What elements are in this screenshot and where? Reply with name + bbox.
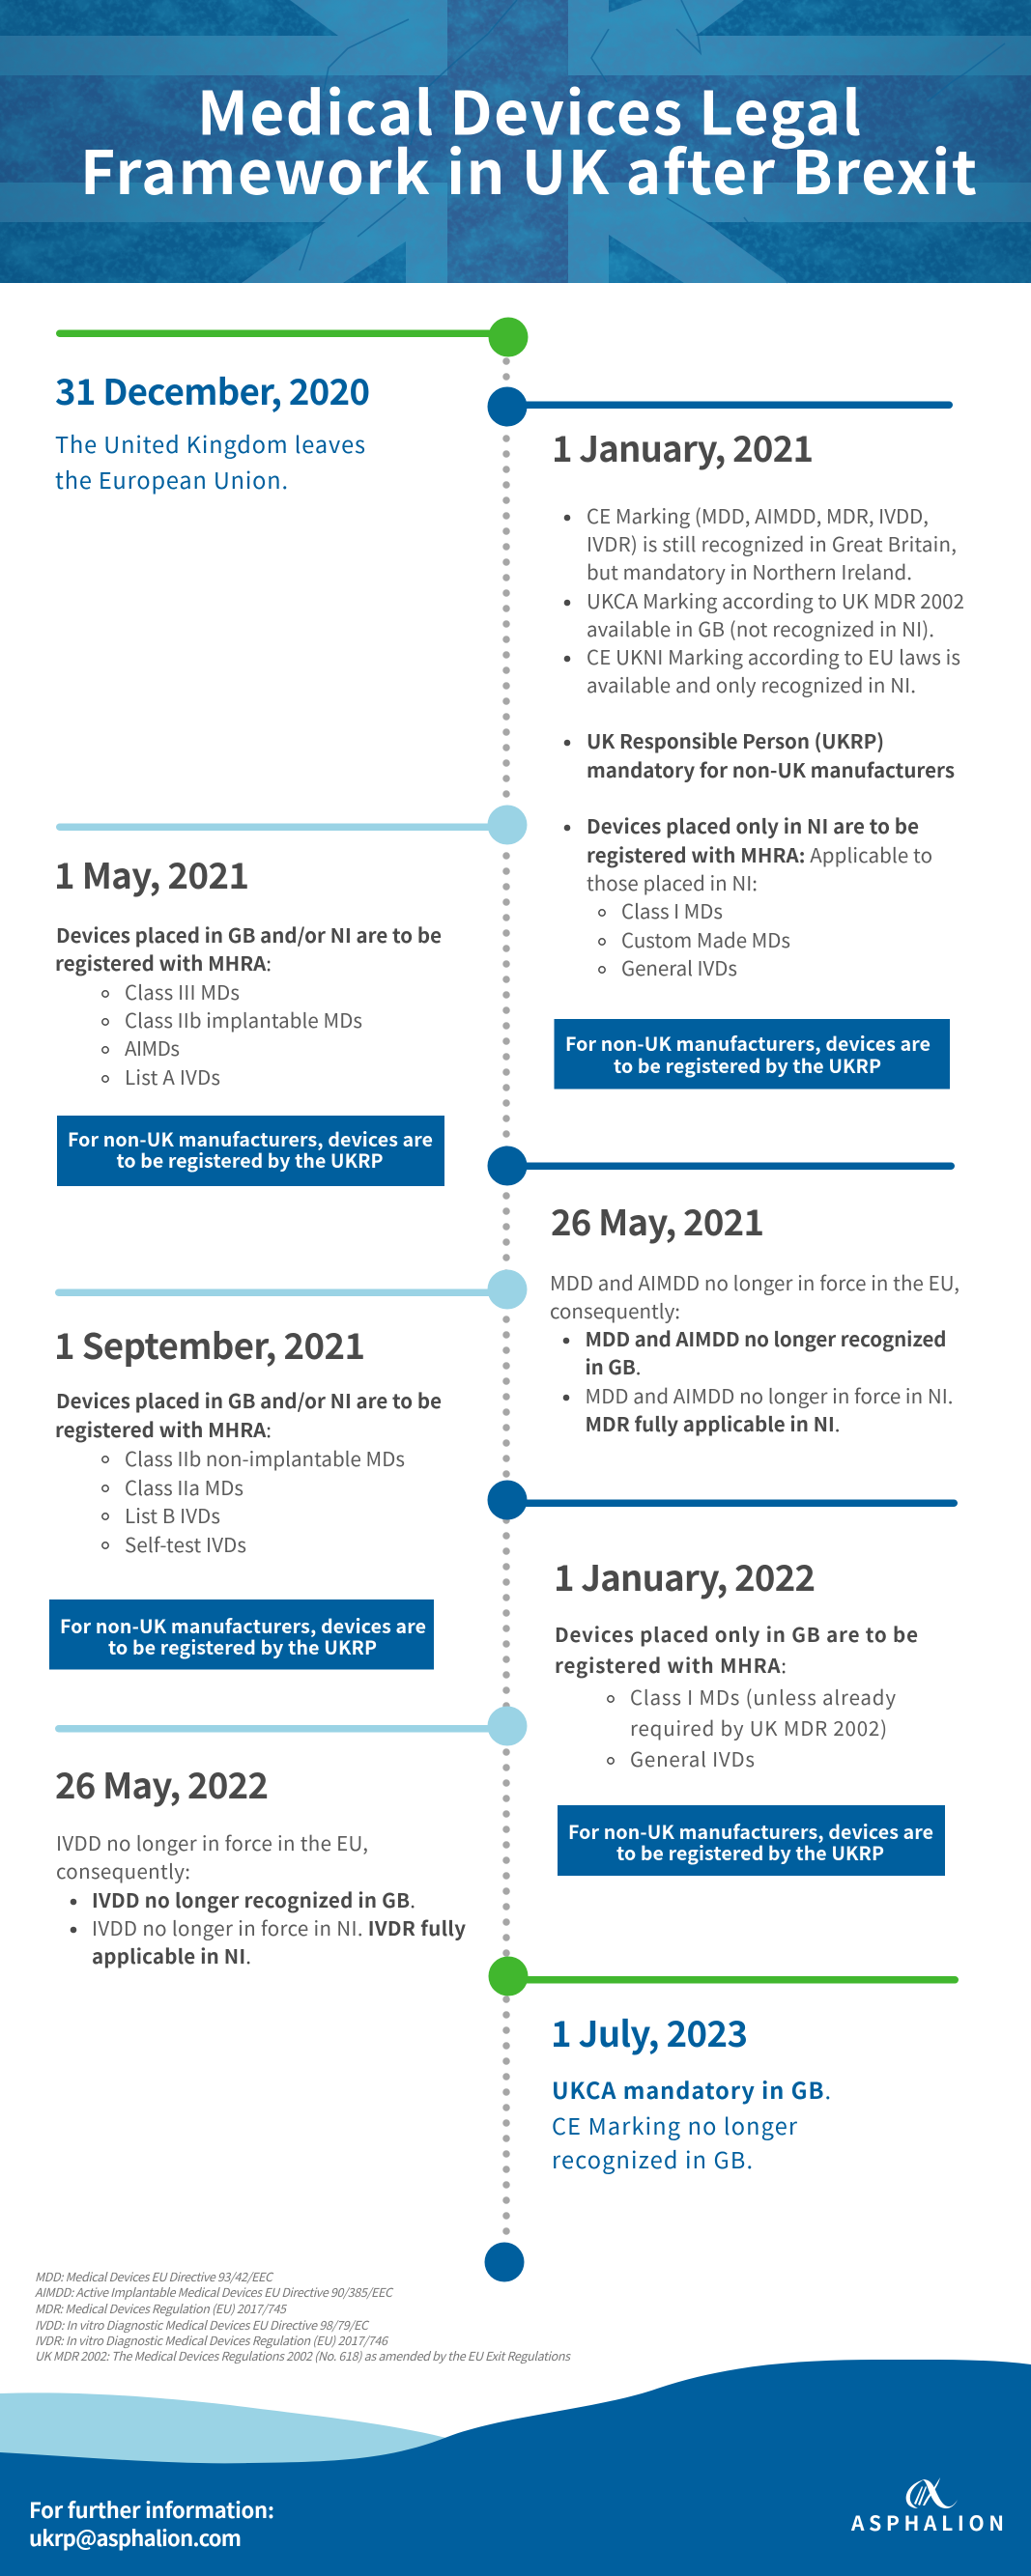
list: devices placed in GB and/or NI, first phase: Class III MDs bbox=[125, 977, 240, 1005]
footnotes: abbreviations: MDD: Medical Devices EU Directive 93/42/EEC bbox=[35, 2267, 274, 2285]
list: IVDD consequences: IVDD no longer recognized in GB. bbox=[92, 1884, 415, 1913]
footnotes: abbreviations: MDR: Medical Devices Regulation (EU) 2017/745 bbox=[35, 2299, 288, 2317]
icon: helix alpha mark bbox=[906, 2477, 958, 2508]
heading: 1 September, 2021: 1 September, 2021 bbox=[54, 1318, 365, 1370]
list: devices placed only in NI: Custom Made MDs bbox=[621, 924, 790, 953]
milestone: 1 May 2021 marker bbox=[56, 806, 528, 844]
milestone: 31 December 2020 marker bbox=[56, 317, 528, 357]
list: CE, UKCA and UKRP requirements: UK Responsible Person (UKRP) bbox=[587, 725, 884, 754]
text: UK leaves the EU bbox=[55, 427, 365, 495]
heading: 1 January, 2022: 1 January, 2022 bbox=[554, 1550, 816, 1601]
milestone: 26 May 2022 marker bbox=[55, 1706, 528, 1746]
list: CE, UKCA and UKRP requirements: IVDR) is still recognized in Great Britain, bbox=[587, 528, 957, 557]
list: devices placed only in GB: Class I MDs (unless already bbox=[630, 1682, 896, 1711]
heading: 26 May, 2022: 26 May, 2022 bbox=[55, 1758, 269, 1809]
list: MDD and AIMDD consequences bbox=[550, 1267, 959, 1437]
list: devices placed in GB and/or NI, first phase: Devices placed in GB and/or NI are to be bbox=[56, 920, 442, 948]
text: UKCA mandatory in GB: CE Marking no longer bbox=[552, 2109, 798, 2141]
list: IVDD consequences: consequently: bbox=[56, 1855, 190, 1884]
logo: Asphalion bbox=[850, 2477, 1004, 2537]
timeline end marker bbox=[485, 2243, 524, 2281]
callout: UKRP registration: For non-UK manufacturers, devices are bbox=[68, 1124, 433, 1152]
list: CE, UKCA and UKRP requirements: but mandatory in Northern Ireland. bbox=[587, 556, 912, 585]
list: CE, UKCA and UKRP requirements: UKCA Marking according to UK MDR 2002 bbox=[587, 585, 964, 614]
list: devices placed in GB and/or NI, first phase: Class IIb implantable MDs bbox=[125, 1005, 362, 1033]
callout: UKRP registration bbox=[555, 1019, 950, 1090]
footnotes: abbreviations bbox=[35, 2267, 571, 2364]
callout: UKRP registration: For non-UK manufacturers, devices are bbox=[565, 1029, 931, 1057]
list: devices placed only in NI: Class I MDs bbox=[621, 895, 723, 924]
list: devices placed in GB and/or NI, first phase bbox=[55, 920, 442, 1090]
milestone: 1 July 2023 marker bbox=[489, 1957, 959, 1996]
callout: UKRP registration: to be registered by the UKRP bbox=[614, 1051, 881, 1079]
callout: UKRP registration bbox=[49, 1599, 434, 1669]
heading: 26 May, 2021: 26 May, 2021 bbox=[551, 1195, 764, 1246]
list: CE, UKCA and UKRP requirements: available in GB (not recognized in NI). bbox=[587, 613, 934, 642]
heading: 1 July, 2023: 1 July, 2023 bbox=[551, 2006, 748, 2057]
callout: UKRP registration bbox=[57, 1116, 444, 1186]
title: Medical Devices Legal bbox=[197, 66, 861, 153]
list: devices placed only in NI: General IVDs bbox=[621, 952, 737, 981]
list: MDD and AIMDD consequences: MDD and AIMDD no longer in force in the EU, bbox=[550, 1267, 959, 1296]
list: devices placed in GB and/or NI, second phase: List B IVDs bbox=[125, 1500, 220, 1529]
list: CE, UKCA and UKRP requirements: mandatory for non-UK manufacturers bbox=[587, 754, 955, 783]
list: MDD and AIMDD consequences: MDR fully applicable in NI. bbox=[586, 1408, 841, 1437]
list: devices placed only in NI: those placed in NI: bbox=[587, 867, 758, 896]
text: UKCA mandatory in GB bbox=[552, 2073, 831, 2175]
list: MDD and AIMDD consequences: MDD and AIMDD no longer recognized bbox=[586, 1323, 947, 1352]
text: UK leaves the EU: The United Kingdom leaves bbox=[55, 427, 365, 460]
list: devices placed only in GB: Devices placed only in GB are to be bbox=[555, 1619, 918, 1648]
list: devices placed only in NI: Devices placed only in NI are to be bbox=[587, 810, 919, 839]
list: CE, UKCA and UKRP requirements: available and only recognized in NI. bbox=[587, 669, 916, 698]
list: CE, UKCA and UKRP requirements bbox=[564, 500, 964, 783]
list: devices placed in GB and/or NI, first phase: registered with MHRA: bbox=[55, 948, 272, 977]
list: devices placed only in NI: registered with MHRA: Applicable to bbox=[587, 839, 932, 868]
list: IVDD consequences bbox=[56, 1827, 466, 1969]
list: MDD and AIMDD consequences: consequently: bbox=[550, 1295, 680, 1324]
heading: 31 December, 2020: 31 December, 2020 bbox=[55, 364, 370, 415]
callout: UKRP registration: For non-UK manufacturers, devices are bbox=[568, 1817, 933, 1845]
title: Framework in UK after Brexit bbox=[80, 125, 977, 212]
list: CE, UKCA and UKRP requirements: CE UKNI Marking according to EU laws is bbox=[587, 641, 960, 670]
list: devices placed in GB and/or NI, second phase: Class IIb non-implantable MDs bbox=[125, 1443, 405, 1472]
callout: UKRP registration: For non-UK manufacturers, devices are bbox=[60, 1611, 426, 1639]
list: CE, UKCA and UKRP requirements: CE Marking (MDD, AIMDD, MDR, IVDD, bbox=[587, 500, 929, 529]
milestone: 1 January 2021 marker bbox=[487, 386, 953, 427]
callout: UKRP registration: to be registered by the UKRP bbox=[116, 1146, 383, 1174]
footnotes: abbreviations: AIMDD: Active Implantable Medical Devices EU Directive 90/385/EEC bbox=[35, 2282, 394, 2301]
list: devices placed in GB and/or NI, first phase: List A IVDs bbox=[125, 1062, 220, 1090]
timeline dotted spine bbox=[502, 361, 510, 2255]
heading: 1 May, 2021: 1 May, 2021 bbox=[54, 848, 249, 899]
list: devices placed in GB and/or NI, second phase: registered with MHRA: bbox=[55, 1414, 272, 1443]
contact details: For further information: bbox=[29, 2494, 274, 2525]
list: IVDD consequences: applicable in NI. bbox=[92, 1940, 251, 1969]
list: devices placed only in GB: registered with MHRA: bbox=[555, 1650, 787, 1679]
list: MDD and AIMDD consequences: in GB. bbox=[586, 1351, 642, 1380]
milestone: 1 January 2022 marker bbox=[487, 1480, 958, 1520]
list: devices placed in GB and/or NI, second phase: Devices placed in GB and/or NI are to be bbox=[56, 1385, 442, 1414]
list: devices placed only in GB: required by UK MDR 2002) bbox=[630, 1713, 887, 1741]
list: devices placed only in GB bbox=[555, 1619, 918, 1772]
header banner with flag background bbox=[0, 0, 1031, 283]
title bbox=[80, 66, 977, 212]
list: devices placed only in NI bbox=[564, 810, 932, 981]
callout: UKRP registration: to be registered by the UKRP bbox=[108, 1632, 377, 1660]
list: MDD and AIMDD consequences: MDD and AIMDD no longer in force in NI. bbox=[586, 1380, 953, 1409]
text: UK leaves the EU: the European Union. bbox=[55, 463, 288, 495]
list: devices placed in GB and/or NI, first phase: AIMDs bbox=[125, 1033, 180, 1062]
list: devices placed in GB and/or NI, second phase: Class IIa MDs bbox=[125, 1472, 243, 1501]
text: UKCA mandatory in GB: recognized in GB. bbox=[552, 2142, 753, 2175]
footer waves bbox=[0, 2360, 1031, 2576]
logo: Asphalion: ASPHALION bbox=[850, 2508, 1004, 2537]
list: devices placed only in GB: General IVDs bbox=[630, 1743, 755, 1772]
footnotes: abbreviations: IVDD: In vitro Diagnostic Medical Devices EU Directive 98/79/EC bbox=[35, 2315, 370, 2334]
list: IVDD consequences: IVDD no longer in force in NI. IVDR fully bbox=[92, 1912, 466, 1941]
footnotes: abbreviations: UK MDR 2002: The Medical Devices Regulations 2002 (No. 618) as amended by the EU Exit Regulations bbox=[35, 2346, 571, 2364]
contact details: ukrp@asphalion.com bbox=[29, 2522, 242, 2553]
milestone: 26 May 2021 marker bbox=[487, 1146, 955, 1186]
footnotes: abbreviations: IVDR: In vitro Diagnostic Medical Devices Regulation (EU) 2017/746 bbox=[35, 2331, 389, 2349]
list: devices placed in GB and/or NI, second phase: Self-test IVDs bbox=[125, 1529, 246, 1558]
contact details bbox=[29, 2494, 274, 2553]
heading: 1 January, 2021: 1 January, 2021 bbox=[552, 421, 814, 472]
callout: UKRP registration: to be registered by the UKRP bbox=[616, 1838, 884, 1866]
callout: UKRP registration bbox=[558, 1805, 945, 1876]
list: devices placed in GB and/or NI, second phase bbox=[55, 1385, 442, 1558]
list: IVDD consequences: IVDD no longer in force in the EU, bbox=[56, 1827, 368, 1856]
milestone: 1 September 2021 marker bbox=[55, 1269, 528, 1310]
text: UKCA mandatory in GB: UKCA mandatory in GB. bbox=[552, 2073, 831, 2106]
